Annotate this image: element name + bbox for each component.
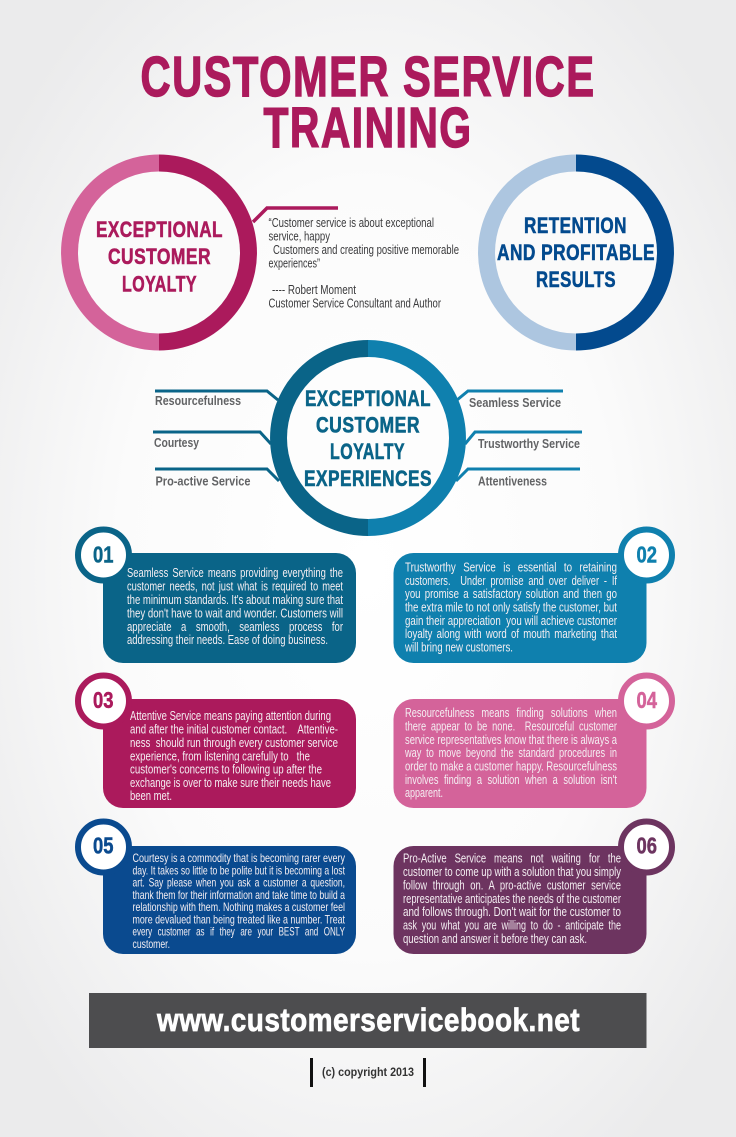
labels: left attributes — [154, 394, 251, 488]
circle: retention and profitable results: RETENTION — [524, 213, 627, 238]
labels: left attributes: Pro-active Service — [156, 474, 251, 488]
panel 05: courtesy: Courtesy is a commodity that is becoming rarer every — [132, 851, 345, 865]
panel 01: seamless service: customer needs, not just what is required to meet — [127, 580, 343, 594]
circle: exceptional customer loyalty — [61, 154, 257, 350]
panel 05: courtesy: every customer as if they are your BEST and ONLY — [132, 924, 345, 938]
panel 02: trustworthy service: customers. Under promise and over deliver - If — [405, 574, 617, 588]
labels: left attributes: Resourcefulness — [155, 394, 241, 408]
quote text: Customers and creating positive memorable — [273, 243, 459, 257]
panel 01: seamless service: appreciate a smooth, seamless process for — [127, 620, 343, 634]
website banner — [89, 993, 646, 1048]
panel 04: resourcefulness: involves finding a solution when a solution isn't — [405, 773, 617, 787]
connector lines: left — [153, 391, 279, 481]
panel 05: courtesy: relationship with them. Nothing makes a customer feel — [132, 900, 345, 914]
panel 01: seamless service: they don't have to wait and wonder. Customers will — [127, 606, 343, 620]
panel 03: attentive service — [78, 676, 356, 808]
panel 04: resourcefulness — [394, 676, 672, 808]
circle: exceptional customer loyalty: EXCEPTIONAL — [96, 217, 223, 242]
labels: right attributes: Trustworthy Service — [478, 437, 580, 451]
labels: right attributes: Attentiveness — [478, 474, 547, 488]
panel 06: pro-active service: 06 — [636, 832, 657, 858]
circle: retention and profitable results: AND PROFITABLE — [497, 240, 655, 265]
copyright: (c) copyright 2013 — [322, 1065, 414, 1079]
circle: exceptional customer loyalty experiences: LOYALTY — [330, 439, 405, 464]
title: TRAINING — [264, 96, 472, 160]
panel 04: resourcefulness: service representatives know that there is always a — [405, 733, 617, 747]
panel 05: courtesy: art. Say please when you ask a customer a question, — [132, 876, 345, 890]
circle: exceptional customer loyalty: LOYALTY — [122, 272, 197, 296]
panel 03: attentive service: Attentive Service means paying attention during — [130, 709, 331, 723]
quote text: service, happy — [268, 230, 331, 244]
panel 05: courtesy — [78, 822, 356, 954]
panel 03: attentive service: 03 — [93, 687, 114, 713]
panel 02: trustworthy service: gain their appreciation you will achieve customer — [405, 614, 617, 628]
circle: exceptional customer loyalty experiences — [270, 340, 466, 536]
circle: retention and profitable results — [478, 154, 674, 350]
panel 04: resourcefulness: 04 — [636, 687, 657, 713]
panel 04: resourcefulness: order to make a customer happy. Resourcefulness — [405, 760, 617, 774]
panel 05: courtesy: thank them for their information and take time to build a — [132, 888, 345, 902]
panel 02: trustworthy service: you promise a satisfactory solution and then go — [405, 587, 617, 601]
panel 01: seamless service: Seamless Service means providing everything the — [127, 566, 343, 580]
panel 04: resourcefulness: Resourcefulness means finding solutions when — [405, 706, 617, 720]
title — [140, 45, 596, 160]
website banner: www.customerservicebook.net — [156, 1002, 580, 1038]
labels: right attributes: Seamless Service — [469, 396, 561, 410]
labels: left attributes: Courtesy — [154, 436, 199, 450]
panel 02: trustworthy service: Trustworthy Service is essential to retaining — [405, 560, 617, 574]
panel 05: courtesy: more devalued than being treated like a number. Treat — [132, 912, 345, 926]
panel 02: trustworthy service: the extra mile to not only satisfy the customer, but — [405, 600, 617, 614]
circle: exceptional customer loyalty: CUSTOMER — [108, 244, 211, 269]
panel 03: attentive service: exchange is over to make sure their needs have — [130, 776, 331, 790]
panel 06: pro-active service: customer to come up with a solution that you simply — [403, 865, 622, 879]
panel 04: resourcefulness: there appear to be none. Resourceful customer — [405, 720, 617, 734]
panel 06: pro-active service — [394, 822, 672, 954]
circle: retention and profitable results: RESULTS — [536, 267, 616, 292]
panel 04: resourcefulness: way to move beyond the standard procedures in — [404, 746, 617, 760]
quote text: Customer Service Consultant and Author — [268, 296, 441, 310]
panel 05: courtesy: 05 — [93, 832, 114, 858]
panel 02: trustworthy service — [394, 530, 672, 663]
panel 05: courtesy: customer. — [132, 937, 170, 951]
panel 04: resourcefulness: apparent. — [405, 786, 443, 800]
labels: right attributes — [469, 396, 580, 488]
panel 01: seamless service: 01 — [93, 542, 114, 568]
panel 03: attentive service: customer's concerns to following up after the — [130, 762, 322, 776]
circle: exceptional customer loyalty experiences: CUSTOMER — [316, 412, 420, 438]
panel 02: trustworthy service: loyalty along with word of mouth marketing that — [405, 627, 617, 641]
panel 01: seamless service — [78, 530, 356, 663]
quote text: “Customer service is about exceptional — [268, 216, 434, 230]
circle: exceptional customer loyalty experiences: EXPERIENCES — [304, 466, 432, 491]
panel 06: pro-active service: ask you what you are willing to do - anticipate the — [403, 918, 621, 932]
panel 05: courtesy: day. It takes so little to be polite but it is becoming a lost — [132, 864, 345, 878]
panel 06: pro-active service: representative anticipates the needs of the customer — [403, 892, 621, 906]
circle: exceptional customer loyalty experiences: EXCEPTIONAL — [305, 386, 431, 411]
panel 01: seamless service: addressing their needs. Ease of doing business. — [127, 633, 328, 647]
panel 06: pro-active service: question and answer it before they can ask. — [403, 932, 587, 946]
panel 03: attentive service: ness should run through every customer service — [130, 736, 338, 750]
panel 01: seamless service: the minimum standards. It's about making sure that — [127, 593, 343, 607]
quote text: experiences” — [268, 256, 320, 270]
panel 06: pro-active service: follow through on. A pro-active customer service — [403, 878, 621, 892]
quote text — [268, 216, 459, 310]
panel 03: attentive service: and after the initial customer contact. Attentive- — [130, 722, 338, 736]
copyright — [310, 1058, 426, 1087]
panel 06: pro-active service: and follows through. Don't wait for the customer to — [403, 905, 621, 919]
panel 02: trustworthy service: will bring new customers. — [404, 640, 513, 654]
panel 02: trustworthy service: 02 — [636, 542, 657, 568]
quote text: ---- Robert Moment — [272, 283, 356, 297]
connector lines: right — [456, 391, 582, 481]
callout line — [253, 208, 338, 222]
panel 06: pro-active service: Pro-Active Service means not waiting for the — [403, 852, 621, 866]
panel 03: attentive service: experience, from listening carefully to the — [130, 750, 310, 764]
panel 03: attentive service: been met. — [130, 789, 172, 803]
